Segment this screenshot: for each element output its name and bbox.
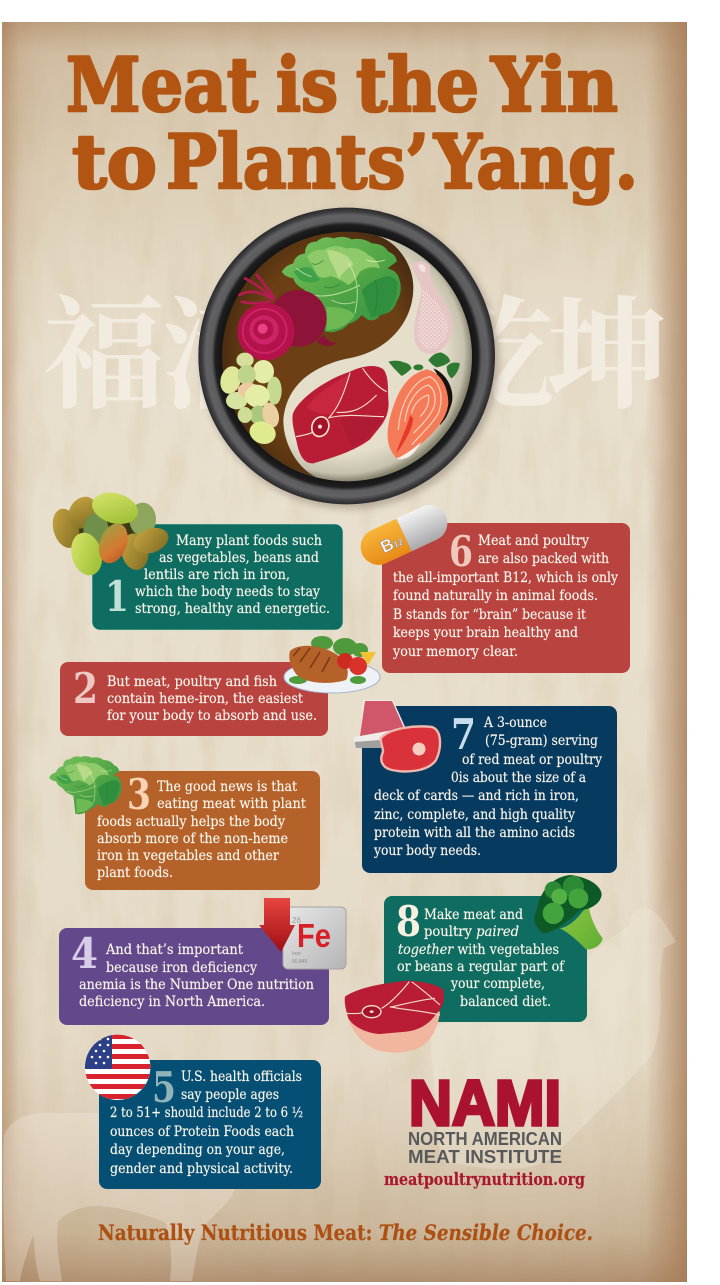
icon: B12 capsule	[355, 499, 453, 571]
icon: broccoli	[534, 875, 603, 949]
meat marrow highlight	[412, 742, 426, 756]
food: beet	[237, 275, 337, 360]
icon: red down arrow	[259, 898, 295, 952]
title: Plants’	[166, 118, 429, 206]
title: the	[356, 41, 479, 129]
number 6: 6	[449, 527, 473, 576]
text block: deficiency in North America.	[79, 994, 265, 1010]
icon: US flag circle	[85, 1034, 151, 1101]
tagline: Naturally Nutritious Meat: The Sensible Choice.	[98, 1220, 593, 1245]
text block: A 3-ounce	[483, 715, 547, 731]
text block: iron in vegetables and other	[97, 848, 279, 864]
text block: And that’s important	[105, 942, 244, 958]
text block: keeps your brain healthy and	[393, 625, 578, 641]
text block: anemia is the Number One nutrition	[79, 977, 314, 993]
icon: iron element tile: Iron	[292, 951, 301, 957]
food: red meat steak	[292, 366, 389, 463]
text block: gender and physical activity.	[110, 1161, 293, 1177]
icon: iron element tile	[283, 907, 346, 969]
logo wordmark: NAMI	[409, 1067, 561, 1139]
number 4: 4	[71, 929, 98, 978]
number 3: 3	[127, 770, 151, 819]
text block: 0is about the size of a	[451, 770, 586, 786]
text block: B stands for “brain” because it	[393, 607, 586, 623]
icon: deck of cards	[354, 700, 406, 748]
text block: protein with all the amino acids	[374, 825, 575, 841]
text block: 2 to 51+ should include 2 to 6 ½	[110, 1105, 303, 1121]
icon: iron element tile: 55.845	[292, 959, 308, 965]
text block: zinc, complete, and high quality	[374, 807, 575, 823]
website URL: meatpoultrynutrition.org	[384, 1170, 585, 1189]
food: lima beans	[217, 353, 282, 448]
text block: The good news is that	[157, 779, 297, 795]
logo line 1: NORTH AMERICAN	[408, 1128, 562, 1149]
text block	[135, 533, 330, 617]
text block	[373, 715, 602, 859]
food: lettuce	[282, 237, 401, 332]
text block: absorb more of the non-heme	[97, 831, 288, 847]
text block: or beans a regular part of	[397, 959, 565, 975]
watermark: chinese calligraphy: 满	[162, 290, 284, 425]
text block: together with vegetables	[398, 942, 559, 958]
step 4: iron deficiency panel	[59, 898, 346, 1025]
text block: Many plant foods such	[176, 533, 322, 549]
text block: U.S. health officials	[181, 1069, 302, 1085]
title: Yin	[490, 41, 618, 129]
text block: eating meat with plant	[157, 796, 306, 812]
text block: contain heme-iron, the easiest	[107, 691, 303, 707]
logo: North American Meat Institute	[408, 1067, 562, 1167]
step 2: heme-iron panel	[60, 636, 380, 736]
panel: red box	[60, 662, 328, 736]
icon: plate with steak and salad	[284, 636, 380, 693]
yin side: brown swirl	[222, 232, 413, 477]
logo line 2: MEAT INSTITUTE	[408, 1146, 562, 1167]
icon: iron element tile: Fe	[297, 917, 331, 954]
text block: which the body needs to stay	[135, 584, 320, 600]
step 1: plant foods panel	[49, 488, 343, 630]
text block: foods actually helps the body	[97, 814, 285, 830]
text block: found naturally in animal foods.	[393, 588, 598, 604]
watermark: chinese calligraphy: 福	[43, 290, 165, 425]
food: parsley	[388, 353, 460, 378]
text block: as vegetables, beans and	[159, 550, 319, 566]
title: Meat	[66, 41, 258, 129]
text block: your body needs.	[373, 843, 481, 859]
icon: beans	[49, 488, 172, 579]
watermark: chinese calligraphy: 坤	[546, 290, 668, 425]
text block: day depending on your age,	[110, 1142, 285, 1158]
text block: for your body to absorb and use.	[107, 708, 317, 724]
number 8: 8	[396, 897, 421, 946]
panel: blue box	[99, 1060, 321, 1189]
text block: are also packed with	[478, 551, 609, 567]
icon: meat cut	[381, 726, 440, 771]
watermark: chinese calligraphy: 乾	[432, 290, 554, 425]
text block: because iron deficiency	[106, 960, 257, 976]
food: salmon steak	[388, 368, 452, 459]
step 6: B12 panel	[355, 499, 630, 673]
number 1: 1	[105, 572, 129, 621]
title: Yang.	[433, 118, 638, 206]
text block	[79, 942, 314, 1010]
panel: red box	[382, 523, 630, 673]
panel: navy box	[362, 706, 617, 873]
step 3: good news panel	[49, 756, 320, 890]
text block: (75-gram) serving	[485, 733, 598, 749]
number 2: 2	[73, 664, 98, 713]
text block: poultry paired	[424, 924, 519, 940]
panel: teal box	[384, 896, 587, 1022]
number 7: 7	[451, 710, 476, 759]
text block: But meat, poultry and fish	[107, 674, 277, 690]
text block: your memory clear.	[392, 644, 518, 660]
text block: plant foods.	[97, 865, 173, 881]
text block: deck of cards — and rich in iron,	[374, 788, 579, 804]
text block	[97, 779, 306, 881]
text block: the all-important B12, which is only	[393, 570, 618, 586]
silhouette: cow	[3, 1113, 234, 1281]
title: is	[276, 41, 338, 129]
text block	[107, 674, 317, 724]
silhouette: rooster	[430, 908, 676, 1169]
text block: Make meat and	[424, 907, 523, 923]
number 5: 5	[152, 1063, 176, 1112]
text block: of red meat or poultry	[462, 752, 602, 768]
watermark: chinese calligraphy	[43, 290, 668, 425]
text block: lentils are rich in iron,	[144, 567, 290, 583]
text block	[392, 533, 618, 660]
food: chicken drumstick	[413, 262, 452, 354]
panel: orange box	[85, 771, 320, 890]
text block: balanced diet.	[460, 994, 551, 1010]
icon: lettuce	[49, 756, 122, 814]
text block: say people ages	[181, 1087, 279, 1103]
text block: ounces of Protein Foods each	[110, 1124, 294, 1140]
step 5: dietary guidance panel	[85, 1034, 321, 1189]
text block	[110, 1069, 303, 1177]
icon: steak with fat cap	[345, 981, 444, 1053]
bowl with yin-yang foods	[198, 208, 499, 509]
panel: purple box	[59, 928, 329, 1025]
title: to	[72, 118, 157, 206]
step 8: balanced diet panel	[345, 875, 603, 1053]
text block: Meat and poultry	[478, 533, 589, 549]
step 7: serving size panel	[354, 700, 617, 873]
text block: strong, healthy and energetic.	[135, 601, 330, 617]
panel: teal box	[92, 524, 343, 630]
icon: iron element tile: 26	[292, 916, 301, 925]
text block: your complete,	[450, 976, 545, 992]
icon: B12 capsule: B12	[377, 530, 406, 557]
text block	[397, 907, 565, 1010]
